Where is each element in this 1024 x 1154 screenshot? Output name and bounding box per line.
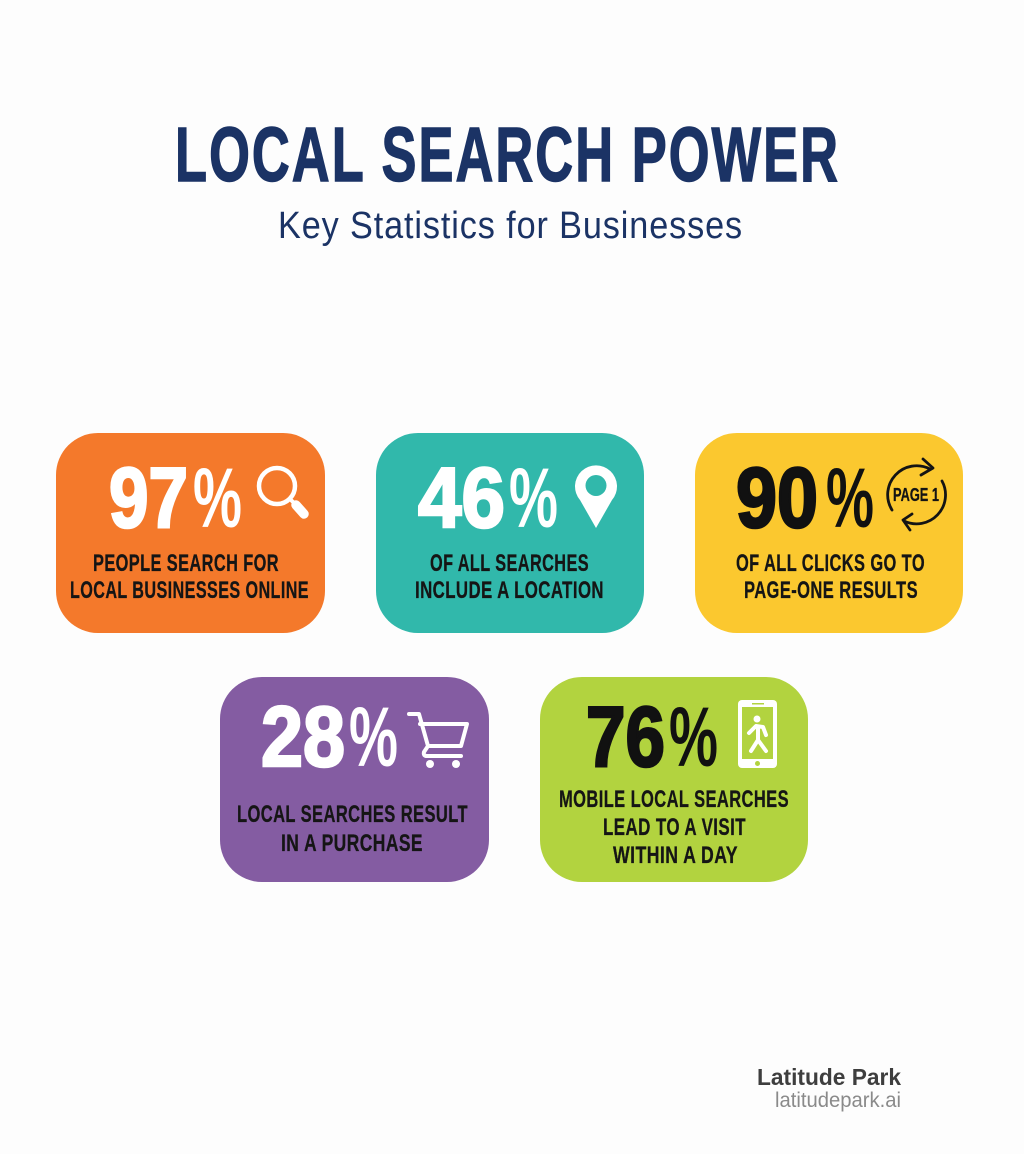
label: clicks <box>736 550 925 604</box>
label: include location: INCLUDE A LOCATION <box>415 577 604 604</box>
panel: 76% mobile visit <box>540 677 808 882</box>
label: people search: PEOPLE SEARCH FOR <box>93 550 279 577</box>
stat: 90%: 90 <box>736 451 818 546</box>
panel: 46% location <box>376 433 644 633</box>
label: purchase <box>237 801 468 857</box>
label: people search <box>70 550 309 604</box>
panel: 90% clicks <box>695 433 963 633</box>
stat: 90%: % <box>826 451 874 545</box>
stat: 76%: 76 <box>586 690 665 785</box>
stat: 28%: 28 <box>261 690 345 785</box>
label: include location <box>415 550 604 604</box>
stat: 28%: % <box>349 690 398 784</box>
panel: 97% people search <box>56 433 325 633</box>
label: purchase: IN A PURCHASE <box>281 830 423 857</box>
footer brand: Latitude Park <box>757 1064 901 1090</box>
label: clicks: OF ALL CLICKS GO TO <box>736 550 925 577</box>
icon: shopping cart <box>409 714 467 768</box>
subtitle: Key Statistics for Businesses <box>278 205 743 247</box>
icon: phone with walking person <box>738 700 777 768</box>
stat: 46%: 46 <box>418 451 505 546</box>
footer brand <box>757 1064 901 1112</box>
stat: 28% <box>261 690 398 785</box>
icon: page 1 cycle arrows: PAGE 1 <box>893 485 939 505</box>
icon: map pin <box>575 465 617 528</box>
label: clicks: PAGE-ONE RESULTS <box>744 577 918 604</box>
label: people search: LOCAL BUSINESSES ONLINE <box>70 577 309 604</box>
label: mobile visit: LEAD TO A VISIT <box>603 814 746 841</box>
label: mobile visit: WITHIN A DAY <box>613 842 738 869</box>
label: mobile visit: MOBILE LOCAL SEARCHES <box>559 786 789 813</box>
label: purchase: LOCAL SEARCHES RESULT <box>237 801 468 828</box>
icon: magnifying glass <box>259 468 304 514</box>
stat: 97%: % <box>193 451 242 545</box>
stat: 90% <box>736 451 874 546</box>
label: include location: OF ALL SEARCHES <box>430 550 589 577</box>
footer brand: latitudepark.ai <box>775 1089 901 1112</box>
label: mobile visit <box>559 786 789 869</box>
stat: 76%: % <box>669 690 718 784</box>
stat: 46%: % <box>509 451 558 545</box>
icon: page 1 cycle arrows <box>888 459 946 530</box>
stat: 46% <box>418 451 558 546</box>
panel: 28% purchase <box>220 677 489 882</box>
stat: 97%: 97 <box>109 451 188 546</box>
